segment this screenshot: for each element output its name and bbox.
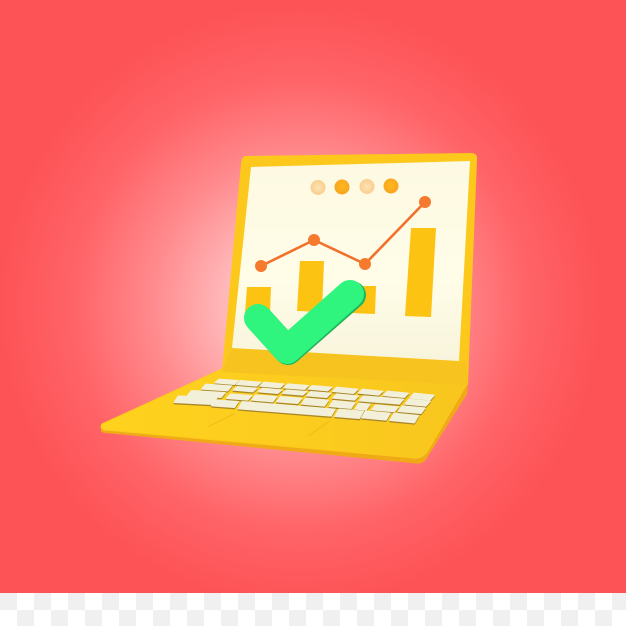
bar chart <box>245 228 436 317</box>
laptop base side edge <box>101 380 468 464</box>
line chart <box>255 196 431 272</box>
laptop <box>101 153 477 464</box>
keys shadow <box>174 381 434 424</box>
keys <box>174 379 434 423</box>
screen <box>232 161 470 361</box>
laptop base deck <box>101 368 468 458</box>
keyboard <box>174 379 434 436</box>
hinge band shading <box>222 348 468 385</box>
icon: green check mark <box>258 294 352 351</box>
legend dots <box>310 178 398 195</box>
trackpad marks <box>208 413 330 436</box>
transparency checker strip <box>0 593 626 626</box>
laptop lid <box>222 153 477 383</box>
